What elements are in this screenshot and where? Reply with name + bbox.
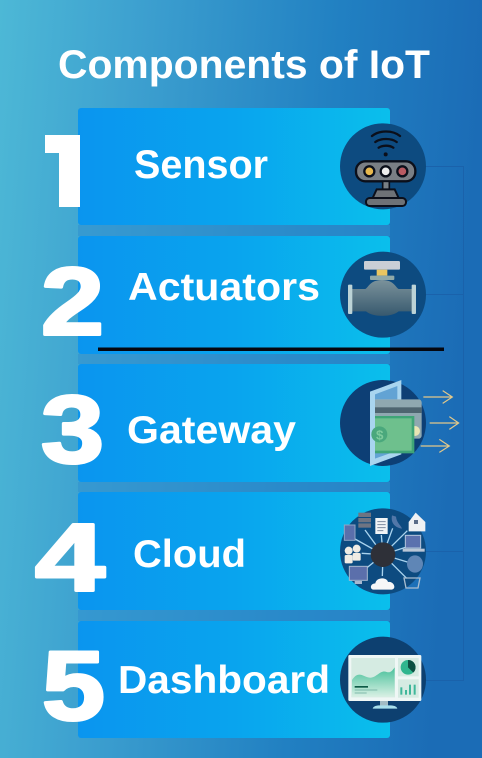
panel: actuators bbox=[41, 236, 390, 364]
number 1: 1 bbox=[28, 114, 88, 230]
panel: dashboard bbox=[42, 621, 390, 740]
document bbox=[375, 518, 388, 534]
phone bbox=[392, 515, 402, 529]
icon: dashboard bbox=[340, 637, 426, 723]
number 1 bbox=[45, 135, 80, 207]
cloud bbox=[371, 578, 394, 590]
black divider line bbox=[98, 348, 444, 351]
label: Sensor: Sensor bbox=[134, 143, 268, 187]
label: Cloud: Cloud bbox=[133, 533, 246, 576]
brain bbox=[407, 555, 423, 573]
panel: sensor bbox=[28, 108, 390, 236]
connector lines bbox=[424, 166, 464, 680]
laptop bbox=[405, 535, 421, 548]
number 2: 2 bbox=[41, 248, 104, 356]
tablet bbox=[344, 525, 355, 540]
label: Actuators: Actuators bbox=[128, 266, 320, 309]
icon: cloud network bbox=[340, 508, 426, 594]
icon: valve bbox=[340, 252, 426, 338]
number 5: 5 bbox=[42, 630, 105, 740]
number 3: 3 bbox=[41, 376, 104, 484]
icon: sensor bbox=[340, 123, 426, 209]
house bbox=[409, 513, 425, 531]
label: Dashboard: Dashboard bbox=[118, 659, 330, 702]
server bbox=[358, 513, 371, 528]
label: Gateway: Gateway bbox=[127, 409, 296, 452]
panel: cloud bbox=[35, 492, 390, 621]
monitor bbox=[349, 566, 367, 580]
icon: gateway bbox=[340, 380, 459, 466]
icon: gateway: $ bbox=[376, 427, 384, 442]
number 4: 4 bbox=[35, 504, 105, 612]
panel: gateway bbox=[41, 364, 390, 492]
people bbox=[345, 545, 361, 563]
basket bbox=[404, 578, 420, 588]
arrows bbox=[421, 391, 459, 452]
title: Components of IoT bbox=[58, 43, 430, 87]
